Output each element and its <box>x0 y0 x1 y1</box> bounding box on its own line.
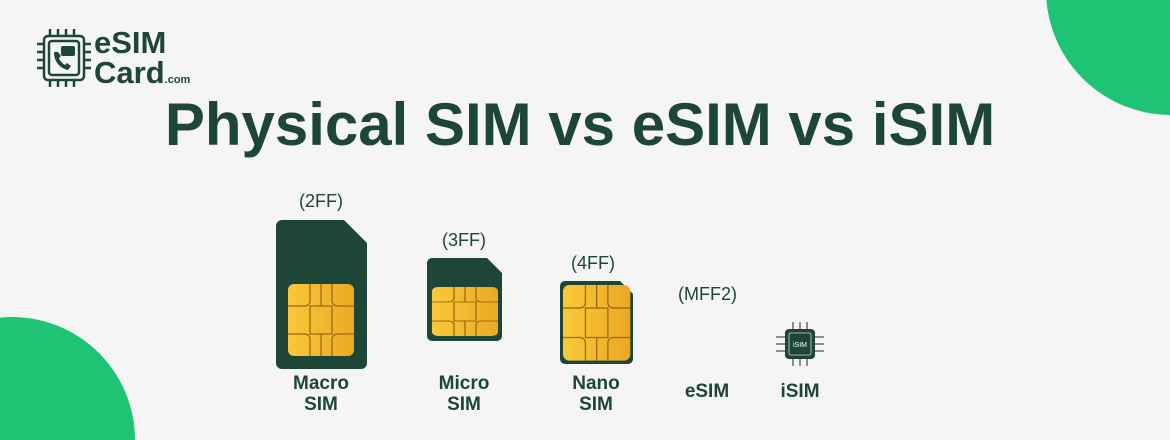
logo: eSIM <box>94 25 166 60</box>
micro label: SIM <box>447 394 481 415</box>
macro label: SIM <box>304 394 338 415</box>
isim chip icon: iSIM <box>793 342 807 349</box>
label 4FF: (4FF) <box>571 253 615 273</box>
label MFF2: (MFF2) <box>678 284 737 304</box>
isim label: iSIM <box>780 381 820 402</box>
esim label: eSIM <box>685 381 729 402</box>
micro label <box>439 373 489 415</box>
micro sim card <box>427 258 502 341</box>
nano label: Nano <box>572 373 620 394</box>
macro label: Macro <box>293 373 349 394</box>
logo <box>37 25 190 90</box>
nano sim card <box>560 281 633 364</box>
title: Physical SIM vs eSIM vs iSIM <box>165 91 995 158</box>
nano label: SIM <box>579 394 613 415</box>
micro label: Micro <box>439 373 489 394</box>
logo: Card.com <box>94 55 190 90</box>
label 3FF: (3FF) <box>442 230 486 250</box>
macro sim card <box>276 220 367 369</box>
isim chip icon <box>776 322 824 366</box>
label 2FF: (2FF) <box>299 191 343 211</box>
nano label <box>572 373 620 415</box>
macro label <box>293 373 349 415</box>
